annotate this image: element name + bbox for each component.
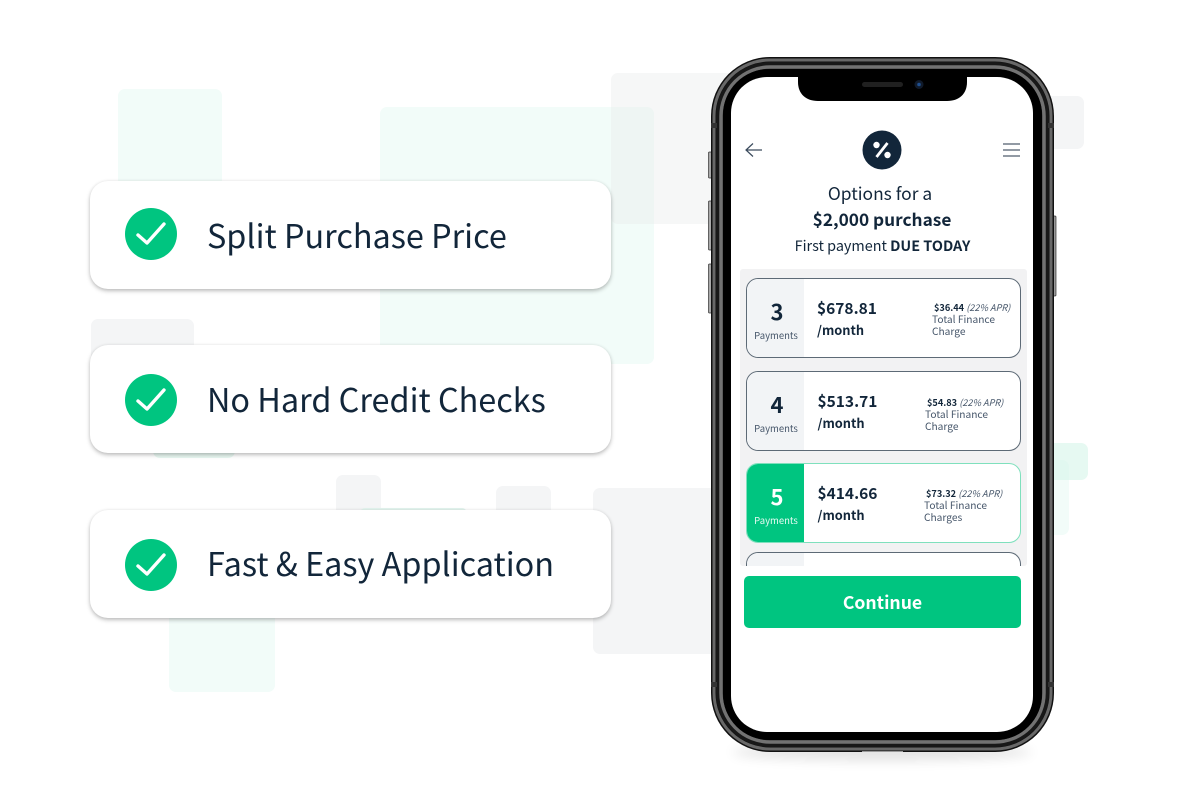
monthly amount: $513.71	[818, 390, 877, 412]
option: 3 payments: /month	[817, 320, 864, 339]
option: 3 payments: Payments	[754, 328, 798, 342]
finance charge: $54.83 (22% APR)	[927, 395, 1003, 409]
finance charge: $73.32 (22% APR)	[926, 486, 1002, 500]
monthly amount: $678.81	[817, 297, 877, 319]
count: 3	[770, 295, 783, 327]
option: 3 payments: Charge	[932, 323, 966, 338]
button: continue	[744, 576, 1021, 628]
text: first payment due today: First payment DUE TODAY	[795, 235, 970, 256]
feature card: Split Purchase Price	[90, 181, 611, 289]
icon: back arrow	[745, 143, 762, 157]
option: partially visible	[746, 552, 1021, 566]
option: 3 payments: Total Finance	[932, 311, 995, 326]
option: 5 payments selected: Payments	[754, 513, 798, 527]
heading: purchase amount: $2,000 purchase	[813, 206, 951, 231]
label: Fast & Easy Application	[207, 539, 554, 586]
count: 4	[770, 388, 783, 420]
phone frame	[708, 57, 1056, 764]
count: 5	[770, 480, 783, 512]
option: 4 payments: Total Finance	[925, 406, 988, 421]
feature card: Fast & Easy Application	[90, 510, 611, 618]
icon: check	[125, 374, 177, 426]
monthly amount: $414.66	[818, 482, 877, 504]
option: 5 payments selected: Charges	[924, 509, 962, 524]
label: Split Purchase Price	[207, 211, 507, 258]
icon: percent logo	[862, 130, 902, 170]
panel: payment options list	[740, 269, 1027, 566]
option: 5 payments selected	[746, 463, 1021, 543]
option: 5 payments selected: /month	[818, 505, 865, 524]
option: 5 payments selected: Total Finance	[924, 497, 987, 512]
option: 4 payments: /month	[818, 413, 865, 432]
finance charge: $36.44 (22% APR)	[934, 300, 1010, 314]
heading: options for a: Options for a	[828, 181, 932, 206]
icon: check	[125, 208, 177, 260]
option: 3 payments	[746, 278, 1021, 358]
option: 4 payments: Charge	[925, 418, 958, 433]
option: 4 payments: Payments	[754, 421, 798, 435]
label: No Hard Credit Checks	[207, 375, 546, 422]
icon: menu	[1003, 144, 1020, 156]
icon: check	[125, 539, 177, 591]
feature card: No Hard Credit Checks	[90, 345, 611, 453]
button: continue: Continue	[843, 590, 922, 615]
option: 4 payments	[746, 371, 1021, 451]
